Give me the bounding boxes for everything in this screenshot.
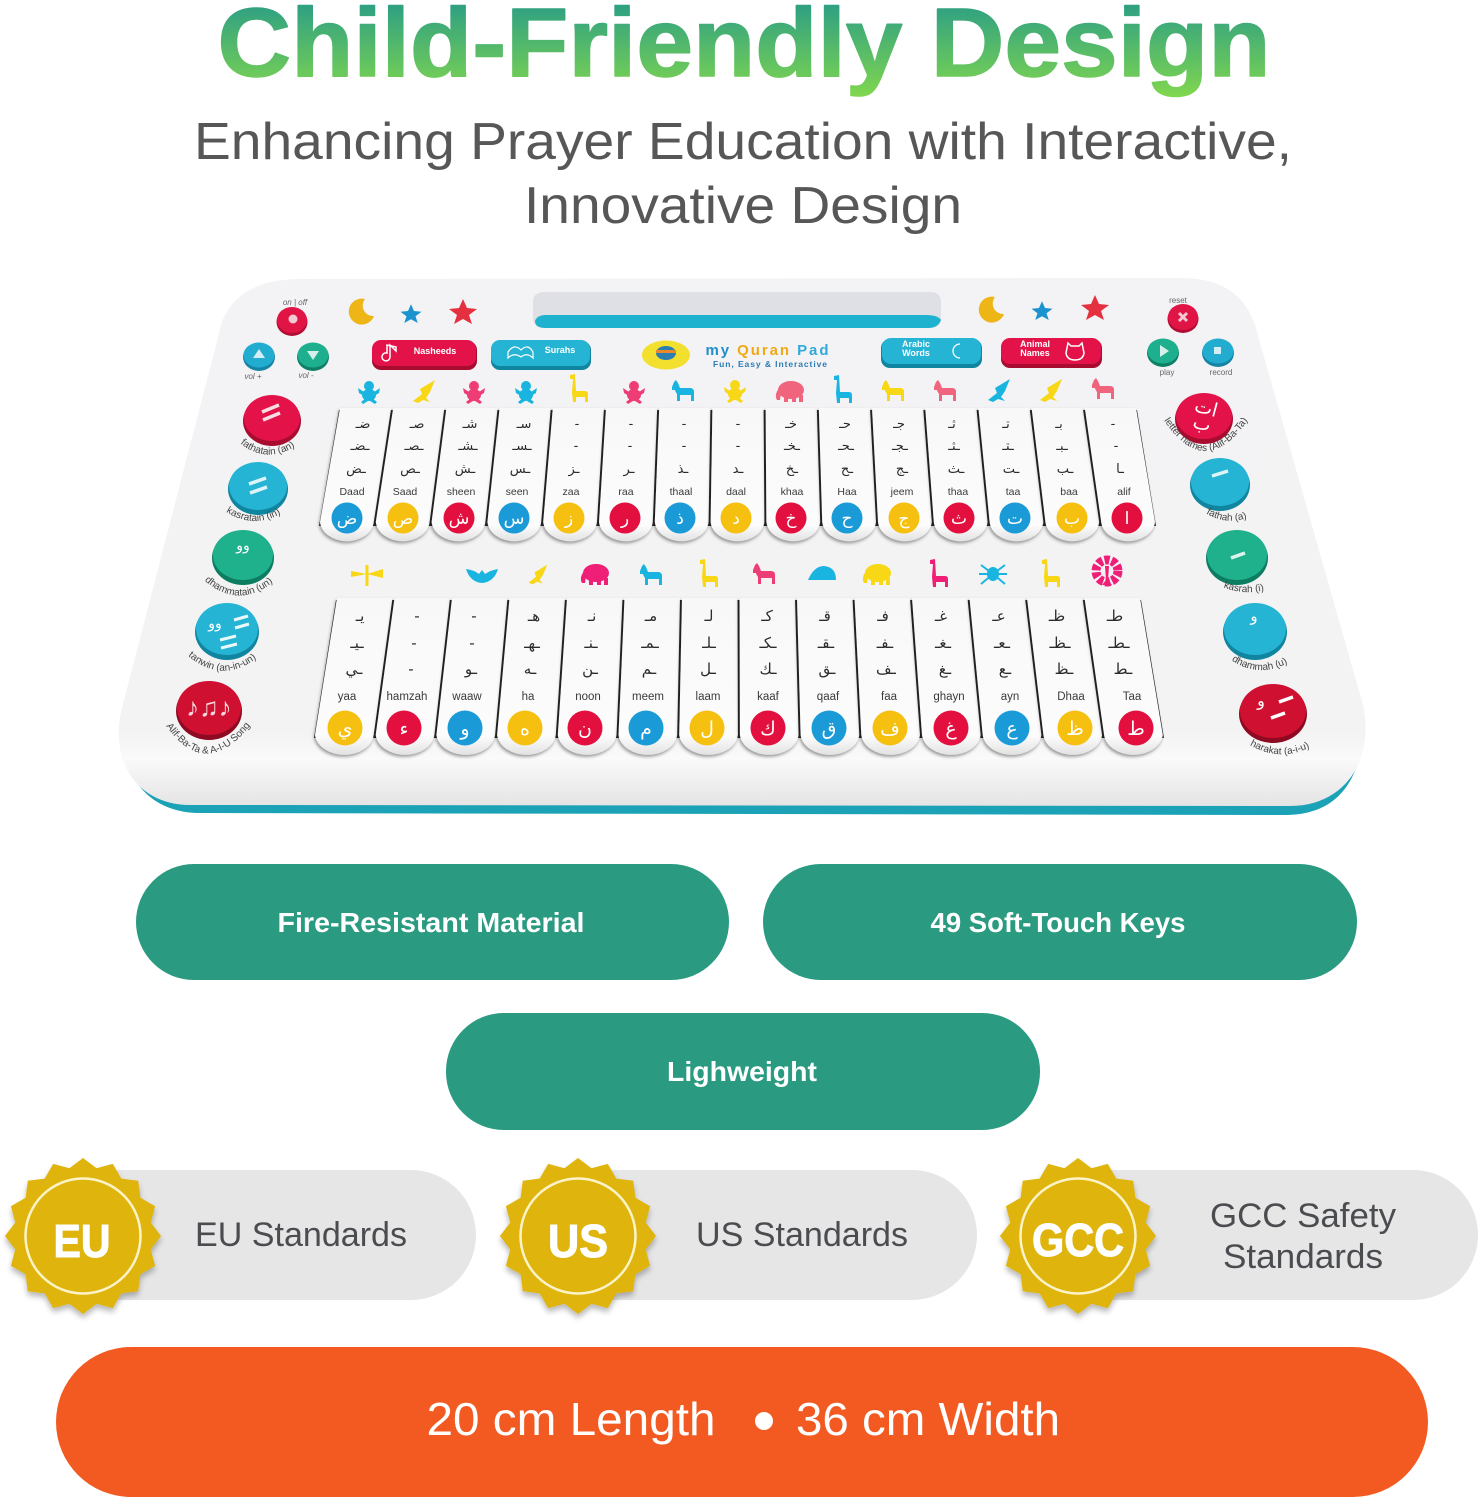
- pill: fire-resistant material: Fire-Resistant Material: [278, 907, 584, 938]
- key: baa: ب: [1064, 509, 1080, 529]
- key: meem: [618, 598, 680, 755]
- key: raa: -: [628, 439, 633, 454]
- key: daal: د: [732, 509, 740, 529]
- icon: camel: [882, 380, 904, 401]
- side button: letter names: ب: [1190, 411, 1213, 437]
- icon: dog: [753, 563, 775, 584]
- key: taa: ت: [1007, 509, 1023, 529]
- key: khaa: خ: [786, 509, 797, 529]
- key: meem: meem: [632, 691, 664, 703]
- key: yaa: yaa: [338, 691, 357, 703]
- key: baa: ـب: [1057, 462, 1073, 477]
- key: Dhaa: ظ: [1066, 718, 1084, 740]
- icon: tiger: [581, 564, 609, 585]
- key: raa: raa: [618, 486, 634, 498]
- side button: kasrah: kasrah (i): [1224, 580, 1264, 594]
- key: alif: ا: [1125, 509, 1129, 529]
- key: kaaf: kaaf: [757, 691, 780, 703]
- key: alif: alif: [1117, 486, 1131, 498]
- key: jeem: jeem: [890, 486, 914, 498]
- key: sheen: ش: [449, 509, 469, 529]
- key: kaaf: ـك: [759, 660, 777, 678]
- key: Saad: Saad: [393, 486, 417, 498]
- key: hamzah: -: [411, 634, 417, 652]
- icon: sheep: [776, 381, 804, 402]
- key: raa: ـر: [623, 462, 635, 477]
- key: ha: [497, 598, 565, 755]
- pill: lightweight: Lighweight: [667, 1056, 817, 1087]
- key: hamzah: [376, 598, 450, 755]
- play button: play: [1160, 368, 1174, 377]
- key: jeem: ـجـ: [891, 439, 908, 454]
- key: thaal: thaal: [670, 486, 692, 498]
- side button: tanwin: [189, 603, 259, 673]
- key: daal: [711, 408, 764, 541]
- key: jeem: جـ: [892, 417, 905, 432]
- key: daal: daal: [726, 486, 746, 498]
- side button: fathatain: fathatain (an): [241, 438, 294, 455]
- side button: tanwin: tanwin (an-in-un): [189, 651, 256, 673]
- side button: dhammatain: dhammatain (un): [206, 578, 272, 596]
- icon: elephant: [863, 564, 891, 585]
- key: ghayn: ghayn: [933, 691, 965, 703]
- dimensions bar: 36 cm Width: [796, 1393, 1060, 1445]
- key: seen: سـ: [516, 417, 531, 432]
- key: kaaf: ـكـ: [758, 634, 777, 652]
- key: thaa: [925, 408, 988, 541]
- key: yaa: ـيـ: [349, 634, 364, 652]
- key: faa: ـفـ: [876, 634, 894, 652]
- key: ayn: عـ: [991, 607, 1006, 625]
- pill: 49 soft-touch keys: [763, 864, 1357, 980]
- key: taa: ـتـ: [1001, 439, 1014, 454]
- icon: dragonfly: [351, 565, 383, 586]
- key: baa: baa: [1060, 486, 1078, 498]
- key: ghayn: غ: [945, 718, 957, 740]
- icon: left moon: [349, 299, 374, 325]
- key: daal: ـد: [733, 462, 744, 477]
- key: zaa: ز: [564, 509, 573, 529]
- on/off button: on | off: [283, 298, 308, 307]
- key: faa: faa: [881, 691, 898, 703]
- key: yaa: ي: [338, 718, 352, 740]
- Nasheeds button: Nasheeds: [414, 346, 456, 356]
- key: Taa: ط: [1127, 718, 1145, 740]
- key: yaa: [315, 598, 392, 755]
- side button: harakat: [1239, 684, 1309, 756]
- icon: deer: [930, 559, 948, 587]
- key: Haa: ح: [842, 509, 853, 529]
- brand logo: [642, 340, 828, 370]
- key: ha: ـه: [524, 660, 537, 678]
- reset button: reset: [1169, 296, 1188, 305]
- dimensions bar: 20 cm Length: [426, 1393, 716, 1445]
- key: kaaf: [740, 598, 799, 755]
- key: faa: [854, 598, 920, 755]
- key: ha: هـ: [527, 607, 540, 625]
- key: ayn: ـعـ: [993, 634, 1011, 652]
- key: raa: [599, 408, 657, 541]
- side button: letter names: letter names (Alif-Ba-Ta): [1164, 416, 1248, 452]
- key: faa: فـ: [876, 607, 889, 625]
- key: Haa: حـ: [838, 417, 851, 432]
- icon: horse: [834, 375, 852, 403]
- key: sheen: شـ: [462, 417, 477, 432]
- key: noon: ن: [578, 718, 592, 740]
- icon: peacock: [1096, 560, 1118, 585]
- brand logo: my Quran Pad: [706, 342, 828, 359]
- key: raa: ر: [620, 509, 629, 529]
- key: taa: ـت: [1003, 462, 1019, 477]
- key: sheen: [432, 408, 498, 541]
- key: khaa: ـخـ: [783, 439, 800, 454]
- key: Dhaa: ظـ: [1048, 607, 1065, 625]
- side button: dhammah: [1223, 603, 1287, 670]
- key: Dhaa: [1027, 598, 1102, 755]
- Animal Names button: Names: [1020, 348, 1050, 358]
- key: Dhaa: ـظـ: [1048, 634, 1071, 652]
- on/off button: [276, 298, 308, 336]
- icon: goat: [640, 564, 662, 585]
- key: meem: ـمـ: [640, 634, 659, 652]
- icon: bird: [528, 565, 547, 584]
- badge: EU standards: EU Standards: [195, 1216, 407, 1254]
- key: faa: ـف: [876, 660, 897, 678]
- record button: [1202, 338, 1234, 377]
- Animal Names button: [1001, 338, 1102, 368]
- key: zaa: -: [575, 417, 580, 432]
- key: qaaf: ق: [822, 718, 836, 740]
- side button: kasratain: kasratain (in): [226, 506, 280, 522]
- key: meem: مـ: [644, 607, 657, 625]
- side button: fathah: fathah (a): [1206, 508, 1246, 522]
- key: jeem: ـج: [896, 462, 908, 477]
- key: sheen: ـش: [455, 462, 475, 477]
- key: ghayn: ـغ: [939, 660, 952, 678]
- key: laam: laam: [696, 691, 720, 703]
- subtitle: Innovative Design: [524, 177, 962, 235]
- volume down button: [297, 342, 329, 380]
- badge: US standards: US: [548, 1215, 608, 1267]
- volume up button: [243, 342, 275, 381]
- key: ayn: ayn: [1001, 691, 1019, 703]
- key: noon: ـن: [582, 660, 599, 678]
- key: raa: -: [629, 417, 634, 432]
- key: thaal: ـذ: [678, 462, 689, 477]
- key: Dhaa: ـظ: [1055, 660, 1074, 678]
- key: taa: [978, 408, 1043, 541]
- key: meem: ـم: [642, 660, 657, 678]
- key: faa: ف: [880, 718, 900, 740]
- key: Haa: Haa: [837, 486, 857, 498]
- key: Haa: ـحـ: [837, 439, 854, 454]
- icon: hedgehog: [808, 566, 836, 580]
- key: thaal: -: [682, 417, 687, 432]
- reset button: [1168, 296, 1198, 333]
- side button: letter names: [1164, 393, 1248, 452]
- key: ayn: ـع: [999, 660, 1012, 678]
- badge: EU standards: [5, 1158, 476, 1314]
- key: Haa: ـح: [841, 462, 853, 477]
- icon: right red star: [1081, 295, 1109, 320]
- key: zaa: zaa: [563, 486, 580, 498]
- key: Saad: [376, 408, 444, 541]
- key: Taa: طـ: [1106, 607, 1123, 625]
- key: Taa: ـطـ: [1107, 634, 1130, 652]
- badge: EU standards: EU: [54, 1215, 110, 1267]
- key: ha: ـهـ: [523, 634, 540, 652]
- key: alif: -: [1111, 417, 1116, 432]
- key: waaw: -: [471, 607, 477, 625]
- key: ghayn: ـغـ: [934, 634, 952, 652]
- key: hamzah: -: [408, 660, 414, 678]
- icon: bear: [724, 380, 746, 403]
- brand logo: Fun, Easy & Interactive: [713, 359, 827, 369]
- key: Taa: [1084, 598, 1163, 755]
- key: thaal: ذ: [676, 509, 684, 529]
- side button: Alif-Ba-Ta song: ♪♫♪: [186, 692, 232, 722]
- key: thaa: ثـ: [947, 417, 956, 432]
- Surahs button: [491, 340, 591, 370]
- side button: dhammatain: وو: [235, 538, 250, 554]
- key: waaw: و: [459, 718, 470, 740]
- key: laam: لـ: [704, 607, 713, 625]
- key: waaw: [436, 598, 508, 755]
- key: meem: م: [640, 718, 652, 740]
- Nasheeds button: [372, 340, 477, 370]
- key: taa: taa: [1006, 486, 1020, 498]
- key: noon: noon: [575, 691, 601, 703]
- subtitle: Enhancing Prayer Education with Interactive,: [194, 113, 1292, 171]
- badge: US standards: [500, 1158, 977, 1314]
- key: Daad: ـضـ: [350, 439, 370, 454]
- key: alif: [1085, 408, 1155, 541]
- icon: llama: [700, 559, 718, 587]
- key: thaa: ـثـ: [947, 439, 960, 454]
- key: seen: [487, 408, 551, 541]
- side button: fathah: [1190, 458, 1250, 522]
- key: thaal: [655, 408, 710, 541]
- key: laam: ـل: [700, 660, 716, 678]
- key: Saad: ـصـ: [404, 439, 424, 454]
- key: thaa: thaa: [948, 486, 968, 498]
- key: thaal: -: [682, 439, 687, 454]
- key: jeem: [872, 408, 932, 541]
- top carrying slot: [533, 292, 941, 328]
- key: khaa: ـخ: [786, 462, 798, 477]
- key: ayn: [970, 598, 1041, 755]
- side button: Alif-Ba-Ta song: Alif-Ba-Ta & A-I-U Song: [166, 722, 251, 754]
- pill: fire-resistant material: [136, 864, 729, 980]
- icon: bat: [466, 569, 498, 583]
- icon: fox: [934, 380, 956, 401]
- icon: right blue star: [1032, 301, 1052, 320]
- key: sheen: ـشـ: [457, 439, 478, 454]
- teal base of pad: [124, 740, 1363, 815]
- key: thaa: ث: [951, 509, 967, 529]
- side button: harakat: harakat (a-i-u): [1250, 739, 1309, 756]
- key: Daad: ضـ: [355, 417, 370, 432]
- icon: frog: [358, 381, 380, 404]
- key: Daad: ض: [337, 509, 357, 529]
- key: laam: ل: [700, 718, 714, 740]
- key: sheen: sheen: [447, 486, 475, 498]
- key: baa: [1032, 408, 1099, 541]
- key: khaa: khaa: [781, 486, 804, 498]
- key: baa: بـ: [1054, 417, 1063, 432]
- pill: 49 soft-touch keys: 49 Soft-Touch Keys: [930, 907, 1186, 938]
- side button: fathatain: [241, 395, 301, 455]
- key: Haa: [819, 408, 876, 541]
- key: ha: ha: [522, 691, 535, 703]
- top row of letter keys: [319, 408, 1156, 541]
- icon: left red star: [449, 299, 477, 324]
- side button: harakat: و: [1256, 691, 1265, 711]
- side button: dhammatain: [206, 530, 274, 596]
- key: qaaf: [797, 598, 859, 755]
- key: qaaf: ـقـ: [817, 634, 835, 652]
- key: yaa: ـي: [346, 660, 363, 679]
- key: waaw: waaw: [451, 691, 482, 703]
- key: waaw: ـو: [464, 660, 478, 678]
- Arabic Words button: [881, 338, 982, 368]
- white pad body: [119, 278, 1366, 806]
- key: ghayn: غـ: [934, 607, 947, 625]
- icon: crocodile: [988, 379, 1010, 402]
- side button: dhammah: و: [1249, 607, 1258, 625]
- key: alif: ـا: [1116, 462, 1124, 477]
- key: waaw: -: [469, 634, 475, 652]
- icon: monkey: [463, 381, 485, 404]
- row 2 animal icons: [351, 559, 1118, 587]
- dimensions bar: [56, 1347, 1428, 1497]
- key: seen: ـسـ: [511, 439, 532, 454]
- Animal Names button: Animal: [1020, 339, 1050, 349]
- key: daal: -: [736, 439, 741, 454]
- key: zaa: [543, 408, 604, 541]
- subtitle: [194, 113, 1292, 235]
- key: seen: س: [504, 509, 524, 529]
- side button: tanwin: وو: [207, 616, 222, 632]
- icon: giraffe: [570, 374, 588, 402]
- key: hamzah: hamzah: [387, 691, 427, 703]
- record button: record: [1210, 368, 1232, 377]
- key: ghayn: [912, 598, 981, 755]
- icon: horse: [672, 380, 694, 401]
- icon: duck: [1040, 379, 1062, 402]
- key: qaaf: ـق: [819, 660, 836, 678]
- badge: US standards: US Standards: [696, 1216, 908, 1254]
- key: Dhaa: Dhaa: [1057, 691, 1085, 703]
- icon: spider: [979, 565, 1007, 584]
- key: noon: نـ: [587, 607, 596, 625]
- icon: bird: [413, 380, 435, 403]
- key: Taa: ـط: [1114, 660, 1133, 678]
- Arabic Words button: Arabic: [902, 339, 930, 349]
- key: hamzah: -: [414, 607, 420, 625]
- product: Quran pad toy: [119, 278, 1366, 815]
- volume up button: vol +: [244, 372, 262, 381]
- side button: dhammah: dhammah (u): [1232, 656, 1287, 670]
- key: taa: تـ: [1001, 417, 1010, 432]
- key: Daad: ـض: [346, 462, 366, 477]
- key: khaa: خـ: [784, 417, 797, 432]
- key: Daad: [320, 408, 391, 541]
- key: kaaf: كـ: [760, 607, 774, 625]
- row 1 animal icons: [358, 374, 1114, 404]
- key: jeem: ج: [899, 509, 910, 529]
- key: laam: [679, 598, 738, 755]
- Surahs button: Surahs: [545, 345, 575, 355]
- key: ayn: ع: [1006, 718, 1018, 740]
- badge: GCC safety standards: Standards: [1223, 1238, 1383, 1276]
- key: daal: -: [736, 417, 741, 432]
- Arabic Words button: Words: [902, 348, 930, 358]
- badge: GCC safety standards: GCC Safety: [1210, 1197, 1396, 1235]
- key: seen: ـس: [510, 462, 530, 477]
- play button: [1147, 338, 1179, 377]
- key: thaa: ـث: [948, 462, 964, 477]
- key: qaaf: قـ: [818, 607, 831, 625]
- volume down button: vol -: [298, 371, 314, 380]
- key: noon: ـنـ: [583, 634, 598, 652]
- icon: right moon: [979, 297, 1004, 323]
- key: Daad: Daad: [339, 486, 365, 498]
- key: kaaf: ك: [760, 718, 776, 740]
- badge: GCC safety standards: GCC: [1032, 1214, 1124, 1266]
- key: Saad: ـص: [400, 462, 420, 477]
- icon: turtle: [515, 381, 537, 404]
- key: seen: seen: [506, 486, 529, 498]
- key: ha: ه: [520, 718, 530, 740]
- key: zaa: ـز: [568, 462, 580, 477]
- badge: GCC safety standards: [1000, 1158, 1478, 1314]
- side button: Alif-Ba-Ta song: [166, 681, 251, 754]
- key: Saad: صـ: [409, 417, 424, 432]
- key: yaa: يـ: [355, 607, 364, 625]
- key: alif: -: [1114, 439, 1119, 454]
- key: Taa: Taa: [1123, 691, 1142, 703]
- key: Saad: ص: [393, 509, 413, 529]
- pill: lightweight: [446, 1013, 1040, 1130]
- key: hamzah: ء: [400, 718, 408, 740]
- key: zaa: -: [574, 439, 579, 454]
- icon: rabbit: [1092, 378, 1114, 399]
- key: baa: ـبـ: [1055, 439, 1068, 454]
- side button: kasratain: [226, 462, 288, 522]
- key: qaaf: qaaf: [817, 691, 840, 703]
- key: khaa: [766, 408, 820, 541]
- side button: kasrah: [1206, 530, 1268, 594]
- key: laam: ـلـ: [701, 634, 716, 652]
- icon: left blue star: [400, 304, 422, 323]
- bottom row of letter keys: [314, 598, 1164, 755]
- icon: cat: [623, 381, 645, 404]
- key: noon: [558, 598, 622, 755]
- icon: giraffe: [1042, 559, 1060, 587]
- side button: letter names: ات: [1192, 395, 1220, 422]
